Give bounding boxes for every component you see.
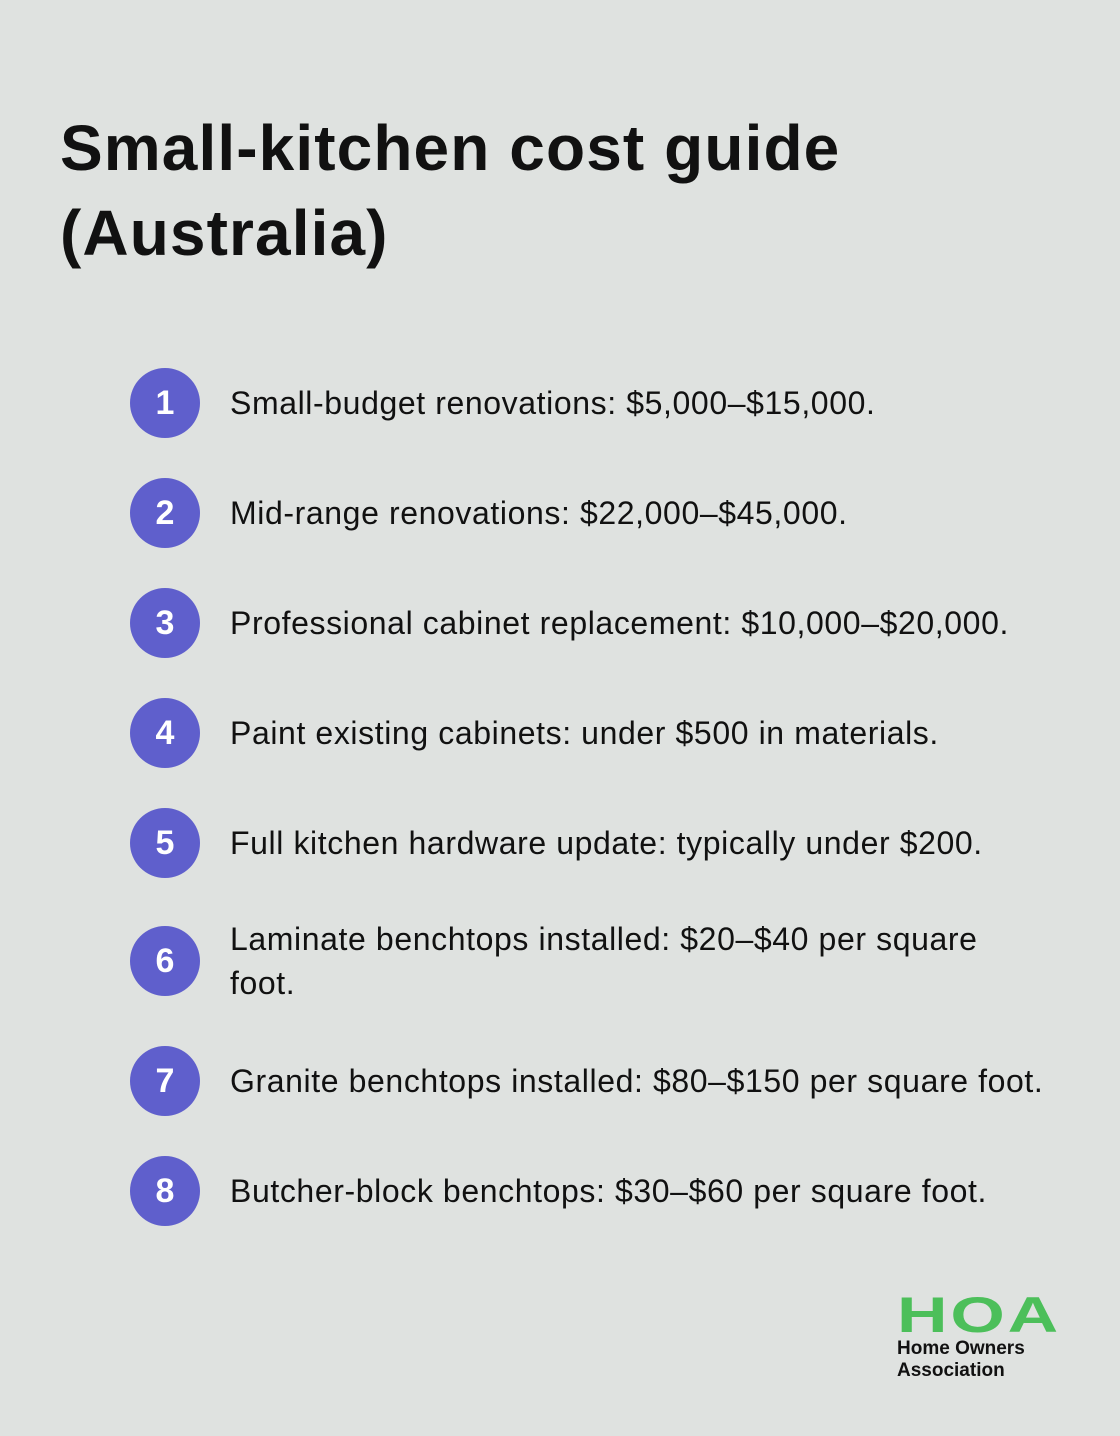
title [60,112,840,269]
item 1: 1 [156,384,174,422]
title: Small-kitchen cost guide [60,112,840,184]
logo text [897,1338,1025,1381]
item 7: 7 [156,1062,174,1100]
item 3: 3 [156,604,174,642]
item 5: Full kitchen hardware update: typically under $200. [230,825,983,861]
logo [897,1287,1061,1381]
item 4: 4 [156,714,174,752]
item 1: Small-budget renovations: $5,000–$15,000. [230,385,876,421]
item 8: 8 [156,1172,174,1210]
item 6 [130,921,978,1001]
item 8: Butcher-block benchtops: $30–$60 per square foot. [230,1173,987,1209]
logo text: Association [897,1360,1005,1381]
item 7: Granite benchtops installed: $80–$150 per square foot. [230,1063,1043,1099]
item 5: 5 [156,824,174,862]
item 6: foot. [230,965,295,1001]
logo mark: HOA [897,1287,1061,1343]
item 8 [130,1156,987,1226]
item 3 [130,588,1009,658]
item 7 [130,1046,1043,1116]
item 2 [130,478,848,548]
logo text: Home Owners [897,1338,1025,1359]
item 5 [130,808,983,878]
item 1 [130,368,876,438]
item 4: Paint existing cabinets: under $500 in materials. [230,715,939,751]
item 6: 6 [156,942,174,980]
item 2: 2 [156,494,174,532]
item 6: Laminate benchtops installed: $20–$40 per square [230,921,978,957]
title: (Australia) [60,197,389,269]
item 2: Mid-range renovations: $22,000–$45,000. [230,495,848,531]
item 3: Professional cabinet replacement: $10,000–$20,000. [230,605,1009,641]
item 4 [130,698,939,768]
